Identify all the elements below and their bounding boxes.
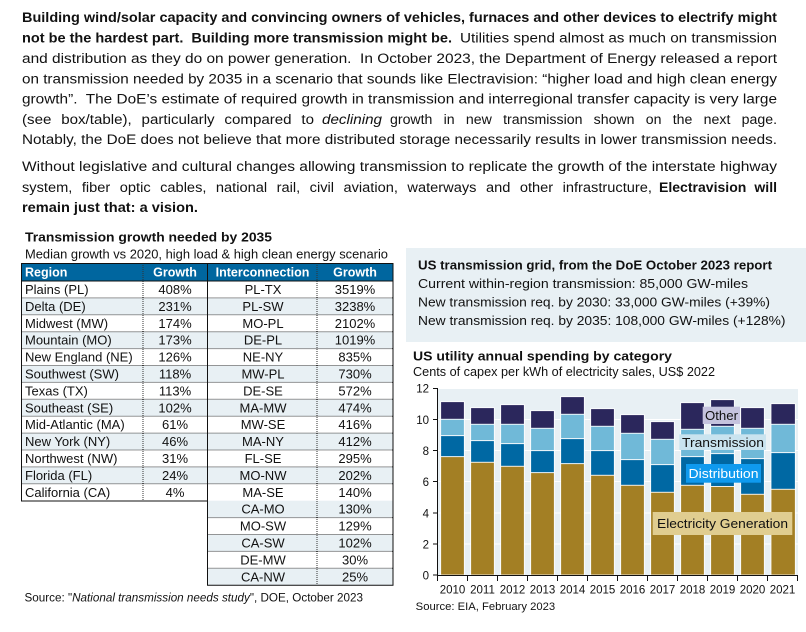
text block: intro paragraph: declining — [322, 112, 383, 127]
box line: current transmission: Current within-region transmission: 85,000 GW-miles — [418, 277, 748, 291]
table header row: Growth — [153, 266, 197, 280]
table rows: interconnection growth column — [335, 282, 376, 584]
table rows: interconnection column: PL-TX — [245, 282, 282, 297]
table rows: interconnection growth column: 730% — [338, 366, 372, 382]
table rows: interconnection growth column: 129% — [338, 519, 372, 534]
table rows: interconnection column: CA-SW — [241, 536, 285, 550]
table rows: interconnection column: DE-PL — [244, 333, 282, 348]
text: spending chart subtitle: Cents of capex per kWh of electricity sales, US$ 2022 — [413, 365, 715, 379]
text block: intro paragraph: and distribution as they do on power generation. In October 2023, the Department of Energy released a report — [22, 51, 777, 66]
table header row: Region — [25, 266, 67, 280]
table rows: region column: New England (NE) — [25, 350, 133, 365]
table rows: region growth column — [158, 282, 192, 500]
y axis labels: 2 — [423, 540, 429, 552]
table rows: region growth column: 46% — [162, 434, 188, 449]
table rows: interconnection growth column: 30% — [342, 552, 368, 567]
bar: 2021 — [771, 404, 795, 575]
table rows: interconnection growth column: 2102% — [335, 316, 376, 331]
text block: closing paragraph — [22, 159, 777, 215]
table rows: region column: Mountain (MO) — [25, 333, 112, 348]
table: transmission growth by region and interconnection — [22, 263, 393, 585]
box line: 2035 requirement: New transmission req. by 2035: 108,000 GW-miles (+128%) — [418, 314, 786, 328]
table rows: region growth column: 126% — [158, 350, 192, 365]
x axis labels: 2014 — [560, 584, 586, 596]
box heading: US transmission grid, from the DoE October 2023 report — [418, 258, 773, 272]
text block: intro paragraph: Building wind/solar capacity and convincing owners of vehicles, furnaces and other devices to electrify might — [22, 10, 778, 25]
y axis labels: 8 — [423, 446, 429, 458]
text: transmission table subtitle: Median growth vs 2020, high load & high clean energy scenario — [25, 248, 388, 262]
text block: intro paragraph: not be the hardest part. Building more transmission might be. — [22, 30, 452, 46]
table rows: region growth column: 31% — [162, 451, 188, 466]
bar: 2012 — [501, 405, 524, 575]
table rows: region column: Midwest (MW) — [25, 316, 108, 331]
text block: closing paragraph: remain just that: a vision. — [22, 200, 198, 215]
text block: intro paragraph — [22, 10, 778, 147]
table rows: interconnection column: DE-MW — [240, 552, 286, 567]
x axis labels: 2012 — [500, 584, 525, 596]
text block: closing paragraph: Electravision will — [659, 180, 777, 195]
table rows: interconnection column: MA-NY — [242, 434, 284, 449]
box line: 2030 requirement: New transmission req. by 2030: 33,000 GW-miles (+39%) — [418, 296, 770, 310]
table rows: interconnection growth column: 3238% — [335, 299, 376, 314]
series label: Distribution — [686, 464, 761, 483]
text block: intro paragraph: growth”. The DoE’s estimate of required growth in transmission and interregional transfer capacity is very large — [22, 92, 777, 106]
x axis labels: 2019 — [710, 584, 735, 596]
x axis labels: 2017 — [650, 584, 675, 596]
y axis labels: 0 — [423, 570, 429, 582]
y axis labels: 4 — [423, 508, 430, 520]
y axis labels: 12 — [416, 384, 429, 396]
table rows: interconnection growth column: 102% — [338, 536, 372, 550]
series label: Transmission: Transmission — [682, 435, 764, 450]
series label: Other: Other — [705, 408, 739, 423]
table rows: interconnection column: MO-NW — [240, 468, 287, 483]
table rows: interconnection growth column: 412% — [338, 434, 372, 449]
bar: 2017 — [651, 422, 674, 575]
table rows: interconnection growth column: 202% — [338, 468, 372, 483]
x axis labels: 2013 — [530, 584, 555, 596]
table rows: interconnection column: DE-SE — [243, 383, 283, 398]
table rows: interconnection column: MW-SE — [241, 417, 286, 432]
bar: 2011 — [471, 408, 494, 575]
table rows: region column: Texas (TX) — [25, 383, 88, 398]
bar: 2016 — [621, 415, 644, 575]
text block: intro paragraph: Notably, the DoE does not believe that more distributed storage necessarily results in lower transmission needs. — [22, 132, 777, 147]
text block: intro paragraph: growth in new transmission shown on the next page. — [390, 112, 777, 127]
table rows: interconnection growth column: 295% — [338, 451, 372, 466]
heading: transmission table title: Transmission growth needed by 2035 — [25, 230, 272, 244]
table header row: Growth — [333, 266, 377, 280]
table rows: interconnection growth column: 416% — [338, 417, 372, 432]
bar: 2010 — [441, 402, 464, 575]
table rows: interconnection growth column: 572% — [338, 383, 372, 398]
table rows: region growth column: 113% — [159, 383, 192, 398]
table rows: interconnection column: PL-SW — [242, 299, 284, 314]
bar: 2019 — [711, 400, 734, 575]
table rows: interconnection column: CA-MO — [241, 502, 285, 517]
table rows: region growth column: 118% — [159, 366, 192, 382]
table rows: region column: Florida (FL) — [25, 468, 92, 483]
bar: 2014 — [561, 397, 584, 575]
table rows: interconnection growth column: 140% — [338, 485, 372, 500]
table rows: region growth column: 174% — [158, 316, 192, 331]
axes — [433, 388, 798, 581]
stacked bar chart: utility spending — [416, 384, 798, 596]
x axis labels: 2015 — [590, 584, 615, 596]
table rows: region column: Delta (DE) — [25, 299, 86, 314]
table rows: region column: New York (NY) — [25, 434, 110, 449]
table rows: interconnection column: MW-PL — [241, 366, 285, 382]
y axis labels — [416, 384, 430, 582]
bar: 2015 — [591, 409, 614, 575]
table rows: interconnection column: CA-NW — [241, 569, 286, 584]
source: chart: Source: EIA, February 2023 — [416, 601, 555, 613]
table rows: region column: Mid-Atlantic (MA) — [25, 417, 125, 432]
x axis labels: 2018 — [680, 584, 705, 596]
table rows: interconnection column: MA-SE — [242, 485, 284, 500]
text block: intro paragraph: Utilities spend almost as much on transmission — [460, 30, 777, 46]
table rows: interconnection growth column: 835% — [338, 350, 372, 365]
table header row: Interconnection — [216, 266, 309, 280]
table rows: region column: Northwest (NW) — [25, 451, 117, 466]
table rows: region growth column: 173% — [158, 333, 192, 348]
table rows: interconnection column: MO-PL — [242, 316, 284, 331]
heading: spending chart title: US utility annual spending by category — [413, 348, 673, 364]
table rows: region growth column: 102% — [158, 400, 192, 415]
table rows: interconnection column — [240, 282, 287, 584]
table rows: region column — [25, 282, 133, 500]
x axis labels — [440, 584, 795, 596]
y axis labels: 6 — [423, 477, 429, 489]
source: table: Source: "National transmission needs study", DOE, October 2023 — [24, 592, 363, 604]
table rows: interconnection growth column: 474% — [338, 400, 372, 415]
text block: intro paragraph: (see box/table), particularly compared to — [22, 112, 314, 127]
table rows: region growth column: 408% — [158, 282, 192, 297]
table rows: interconnection growth column: 25% — [342, 569, 368, 584]
table header row — [22, 263, 393, 281]
bar: 2018 — [681, 403, 704, 575]
x axis labels: 2021 — [770, 584, 795, 596]
table rows: interconnection column: MA-MW — [240, 400, 287, 415]
x axis labels: 2020 — [740, 584, 765, 596]
table rows: interconnection column: NE-NY — [243, 350, 284, 365]
series label: Electricity Generation — [653, 512, 792, 535]
table rows: region column: Plains (PL) — [25, 282, 89, 297]
table rows: interconnection column: MO-SW — [240, 519, 287, 534]
y axis labels: 10 — [416, 415, 429, 427]
x axis labels: 2011 — [470, 584, 495, 596]
table rows: region growth column: 231% — [158, 299, 192, 314]
table rows: interconnection growth column: 130% — [338, 502, 372, 517]
x axis labels: 2010 — [440, 584, 465, 596]
table rows: region column: California (CA) — [25, 485, 110, 500]
table rows: interconnection growth column: 1019% — [335, 333, 376, 348]
text block: closing paragraph: Without legislative and cultural changes allowing transmission to replicate the growth of the interstate highway — [22, 159, 777, 174]
table rows: interconnection column: FL-SE — [245, 451, 282, 466]
table rows: region column: Southwest (SW) — [25, 366, 119, 382]
text block: closing paragraph: system, fiber optic cables, national rail, civil aviation, waterways and other infrastructure, — [22, 180, 652, 195]
bar: 2020 — [741, 408, 764, 575]
series label: Distribution: Distribution — [688, 466, 758, 481]
table rows: region growth column: 24% — [162, 468, 188, 483]
table rows: interconnection growth column: 3519% — [335, 282, 376, 297]
bar: 2013 — [531, 411, 554, 575]
table rows: region growth column: 4% — [166, 485, 185, 500]
table rows: region column: Southeast (SE) — [25, 400, 113, 415]
series label: Electricity Generation: Electricity Generation — [657, 516, 788, 531]
x axis labels: 2016 — [620, 584, 645, 596]
text block: intro paragraph: on transmission needed by 2035 in a scenario that sounds like Electravision: “higher load and high clean energy — [22, 72, 777, 86]
table rows: region growth column: 61% — [162, 417, 188, 432]
panel: US transmission grid box — [406, 248, 806, 342]
